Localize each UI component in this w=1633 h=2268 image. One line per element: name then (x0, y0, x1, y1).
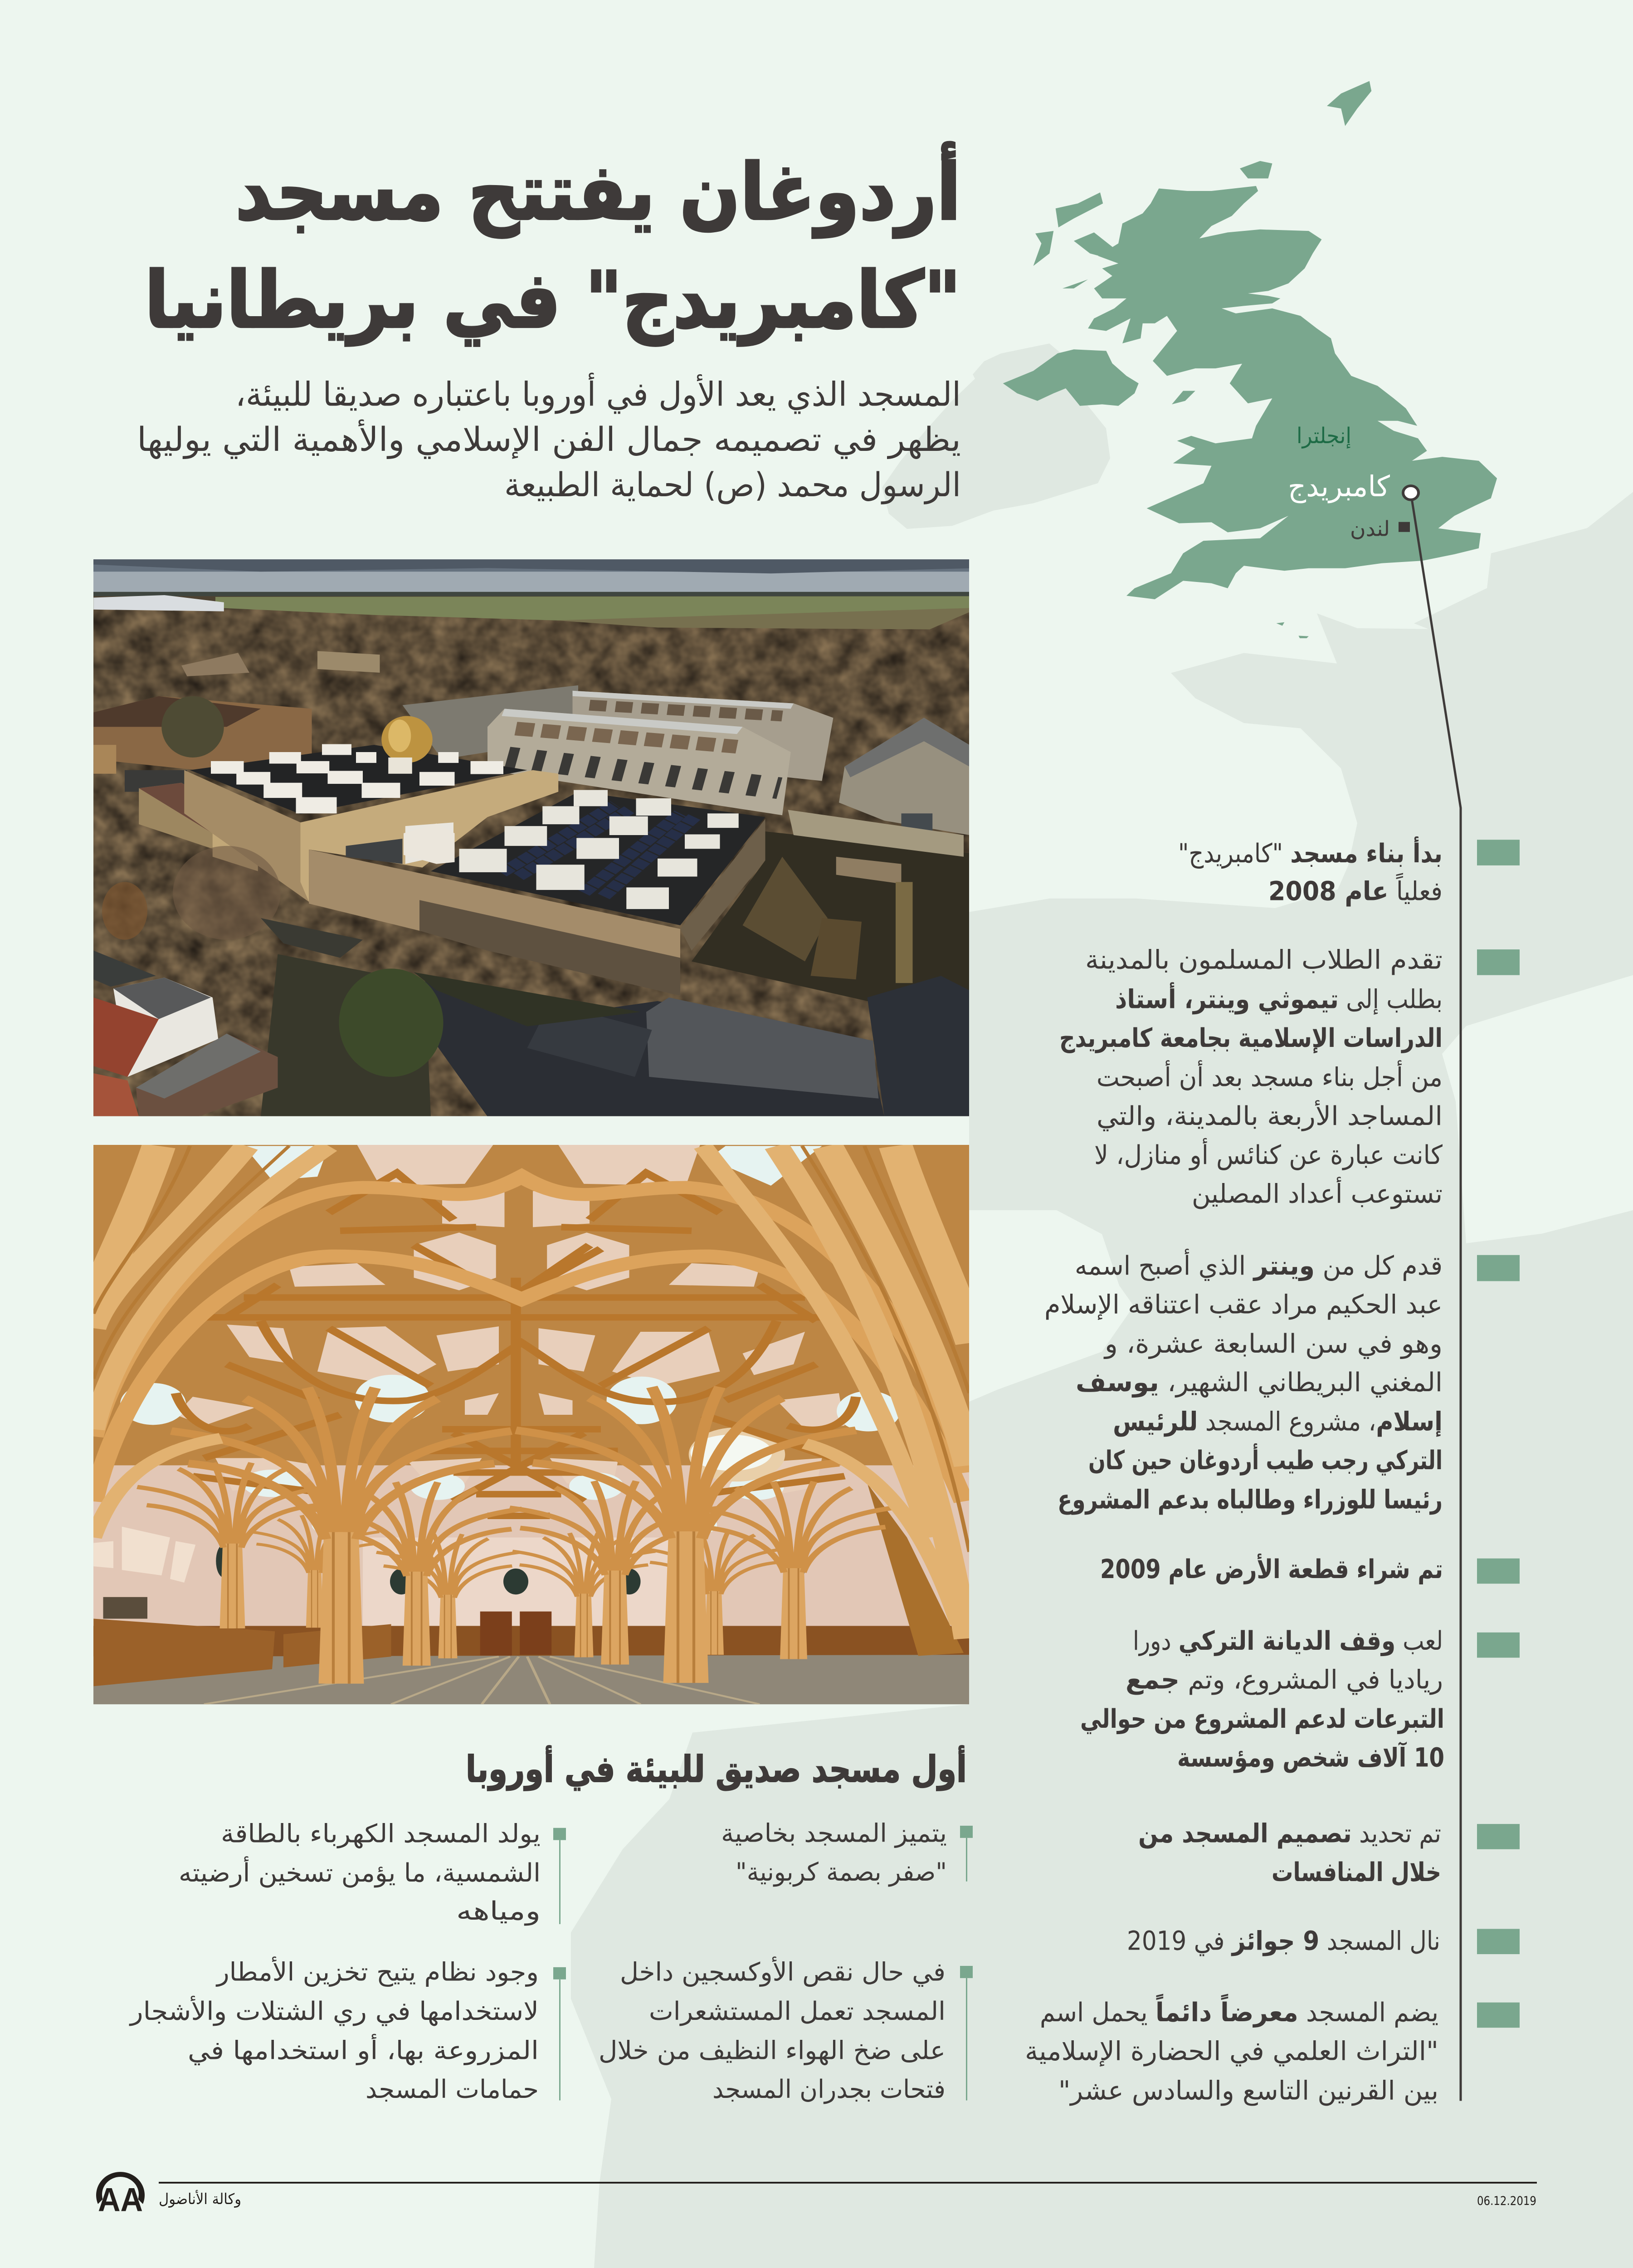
solar panels (502, 804, 694, 896)
intro paragraph: يظهر في تصميمه جمال الفن الإسلامي والأهمية التي يوليها (137, 419, 961, 459)
ceiling lattice (176, 1173, 856, 1516)
bullet: solar electricity (179, 1819, 566, 1926)
bullet: solar electricity: ومياهه (456, 1897, 541, 1926)
bare tree (173, 846, 281, 940)
bullet: zero carbon footprint: يتميز المسجد بخاصية (721, 1819, 947, 1848)
map label: London (1350, 517, 1410, 541)
timeline item: Winter and Yusuf Islam presented project: رئيسا للوزراء وطالباه بدعم المشروع (1058, 1484, 1443, 1515)
timeline item: construction began 2008: فعلياً عام 2008 (1268, 873, 1443, 907)
timeline item: students asked Timothy Winter: من أجل بناء مسجد بعد أن أصبحت (1097, 1060, 1443, 1093)
title: "كامبريدج" في بريطانيا (145, 255, 961, 346)
footer rule (159, 2182, 1537, 2184)
timeline item: land purchased 2009: تم شراء قطعة الأرض عام 2009 (1100, 1553, 1443, 1585)
conifer tree (339, 968, 444, 1077)
marker: Cambridge location (1403, 486, 1419, 500)
map label: England: إنجلترا (1297, 423, 1351, 449)
timeline item: Winter and Yusuf Islam presented project: التركي رجب طيب أردوغان حين كان (1088, 1443, 1443, 1476)
large round oculus (689, 1427, 785, 1481)
timeline item: Winter and Yusuf Islam presented project: وهو في سن السابعة عشرة، و (1103, 1328, 1443, 1359)
dark garden middle (414, 972, 640, 1026)
date: 06.12.2019 (1477, 2194, 1536, 2208)
second roof skylights (459, 790, 739, 909)
white hangar (93, 595, 224, 611)
column fans, rear (250, 1515, 379, 1628)
main hall walls (184, 770, 309, 902)
bullet: rainwater storage (129, 1957, 566, 2104)
bullet: oxygen sensors: على ضخ الهواء النظيف من خلال (599, 2036, 946, 2065)
timeline item: students asked Timothy Winter: الدراسات الإسلامية بجامعة كامبريدج (1059, 1022, 1443, 1054)
timeline item: permanent exhibition: بين القرنين التاسع والسادس عشر" (1058, 2075, 1438, 2106)
bullet: rainwater storage: لاستخدامها في ري الشتلات والأشجار (129, 1996, 539, 2026)
subheading: first eco-friendly mosque in Europe: أول مسجد صديق للبيئة في أوروبا (466, 1745, 967, 1791)
map: Northern Ireland (1003, 349, 1139, 406)
timeline item: permanent exhibition (1025, 1994, 1520, 2106)
bullet: oxygen sensors: المسجد تعمل المستشعرات (649, 1997, 946, 2026)
column fans, front (171, 1388, 512, 1684)
timeline item: students asked Timothy Winter: كانت عبارة عن كنائس أو منازل، لا (1094, 1138, 1443, 1171)
timeline item: design chosen through competition (1138, 1818, 1520, 1887)
timeline item: Turkish Diyanet Foundation and donations: لعب وقف الديانة التركي دورا (1133, 1625, 1443, 1657)
timeline item: Winter and Yusuf Islam presented project: عبد الحكيم مراد عقب اعتناقه الإسلام (1044, 1289, 1443, 1320)
background land: Ireland (882, 343, 1110, 529)
tree near houses (161, 696, 224, 758)
great arches (93, 1177, 966, 1501)
timeline item: Turkish Diyanet Foundation and donations: 10 آلاف شخص ومؤسسة (1177, 1741, 1444, 1773)
second black roof (431, 792, 765, 925)
sky (93, 559, 969, 572)
intro paragraph (137, 372, 961, 504)
apartment blocks (403, 685, 578, 759)
timeline item: students asked Timothy Winter (1059, 944, 1520, 1209)
doors (480, 1612, 512, 1656)
intro paragraph: المسجد الذي يعد الأول في أوروبا باعتباره صديقا للبيئة، (235, 372, 961, 414)
bullet: rainwater storage: حمامات المسجد (366, 2075, 539, 2104)
skylights (120, 1146, 900, 1534)
golden dome (381, 716, 433, 763)
wall (91, 1465, 980, 1631)
leader line from Cambridge to timeline (1411, 493, 1461, 2101)
timeline item: Turkish Diyanet Foundation and donations: التبرعات لدعم المشروع من حوالي (1080, 1703, 1444, 1735)
timeline item: students asked Timothy Winter: تقدم الطلاب المسلمون بالمدينة (1085, 944, 1443, 975)
foreground left houses (93, 951, 156, 987)
ceiling panels (176, 1145, 844, 1498)
title (145, 142, 961, 346)
bullet: rainwater storage: المزروعة بها، أو استخدامها في (188, 2034, 539, 2065)
timeline item: design chosen through competition: خلال المنافسات (1272, 1857, 1441, 1887)
bullet: rainwater storage: وجود نظام يتيح تخزين الأمطار (215, 1957, 539, 1987)
bullet: oxygen sensors: في حال نقص الأوكسجين داخل (620, 1957, 946, 1987)
houses, left (93, 696, 312, 774)
bullet: solar electricity: يولد المسجد الكهرباء بالطاقة (221, 1819, 541, 1848)
bullet: oxygen sensors (599, 1957, 973, 2104)
corner rib bundles (93, 1146, 972, 1638)
wainscot (91, 1626, 980, 1657)
main hall black roof (190, 745, 527, 814)
timeline item: permanent exhibition: يضم المسجد معرضاً دائماً يحمل اسم (1040, 1994, 1438, 2028)
map label: London: لندن (1350, 517, 1390, 541)
floor (91, 1655, 980, 1706)
right gabled buildings (839, 718, 970, 835)
bullet: zero carbon footprint (721, 1819, 973, 1887)
rooftop skylights (211, 744, 503, 813)
fields (215, 596, 980, 621)
logo: Anadolu Agency: AA (98, 2181, 143, 2218)
timeline item: design chosen through competition: تم تحديد تصميم المسجد من (1138, 1818, 1441, 1849)
timeline item: students asked Timothy Winter: المساجد الأربعة بالمدينة، والتي (1097, 1100, 1443, 1132)
map: Scottish and other islands (1033, 81, 1371, 638)
bullet: solar electricity: الشمسية، ما يؤمن تسخين أرضيته (179, 1856, 541, 1888)
title: أردوغان يفتتح مسجد (235, 142, 961, 238)
timeline item: construction began 2008: بدأ بناء مسجد "كامبريدج" (1178, 836, 1443, 869)
map label: Cambridge: كامبريدج (1288, 470, 1390, 503)
white plant box (404, 824, 454, 864)
map: United Kingdom (1003, 81, 1497, 638)
timeline item: Winter and Yusuf Islam presented project (1044, 1248, 1520, 1515)
timeline item: 9 awards in 2019: نال المسجد 9 جوائز في 2019 (1127, 1926, 1440, 1956)
intro paragraph: الرسول محمد (ص) لحماية الطبيعة (504, 465, 961, 504)
footer (96, 2172, 1537, 2218)
second roof walls (309, 850, 680, 996)
timeline item: permanent exhibition: "التراث العلمي في الحضارة الإسلامية (1025, 2035, 1438, 2067)
timeline item: Winter and Yusuf Islam presented project: إسلام، مشروع المسجد للرئيس (1113, 1406, 1443, 1437)
left screen (93, 1619, 275, 1686)
photo: wooden interior of the mosque (91, 1140, 980, 1706)
timeline item: Winter and Yusuf Islam presented project: المغني البريطاني الشهير، يوسف (1076, 1367, 1443, 1398)
right gold wall panel (867, 1483, 964, 1656)
agency name: وكالة الأناضول (159, 2190, 241, 2208)
timeline item: construction began 2008 (1178, 836, 1520, 907)
timeline item: Winter and Yusuf Islam presented project: قدم كل من وينتر الذي أصبح اسمه (1075, 1248, 1443, 1281)
background land: continental Europe (571, 492, 1633, 2268)
ceiling base (91, 1140, 980, 1501)
bullet: oxygen sensors: فتحات بجدران المسجد (712, 2075, 946, 2104)
timeline item: Turkish Diyanet Foundation and donations: رياديا في المشروع، وتم جمع (1126, 1664, 1443, 1695)
garden, right (692, 831, 970, 1001)
map: Great Britain (1088, 186, 1497, 599)
bullet: zero carbon footprint: "صفر بصمة كربونية" (736, 1857, 947, 1887)
left window niches (122, 1527, 170, 1575)
timeline item: Turkish Diyanet Foundation and donations (1080, 1625, 1520, 1773)
mosque back annex (139, 783, 258, 864)
timeline item: students asked Timothy Winter: تستوعب أعداد المصلين (1192, 1177, 1443, 1209)
calligraphy roundels (216, 1545, 806, 1594)
foreground slate roofs (425, 981, 884, 1117)
photo: aerial view of the mosque (91, 557, 980, 1117)
timeline item: students asked Timothy Winter: بطلب إلى تيموثي وينتر، أستاذ (1115, 982, 1443, 1015)
